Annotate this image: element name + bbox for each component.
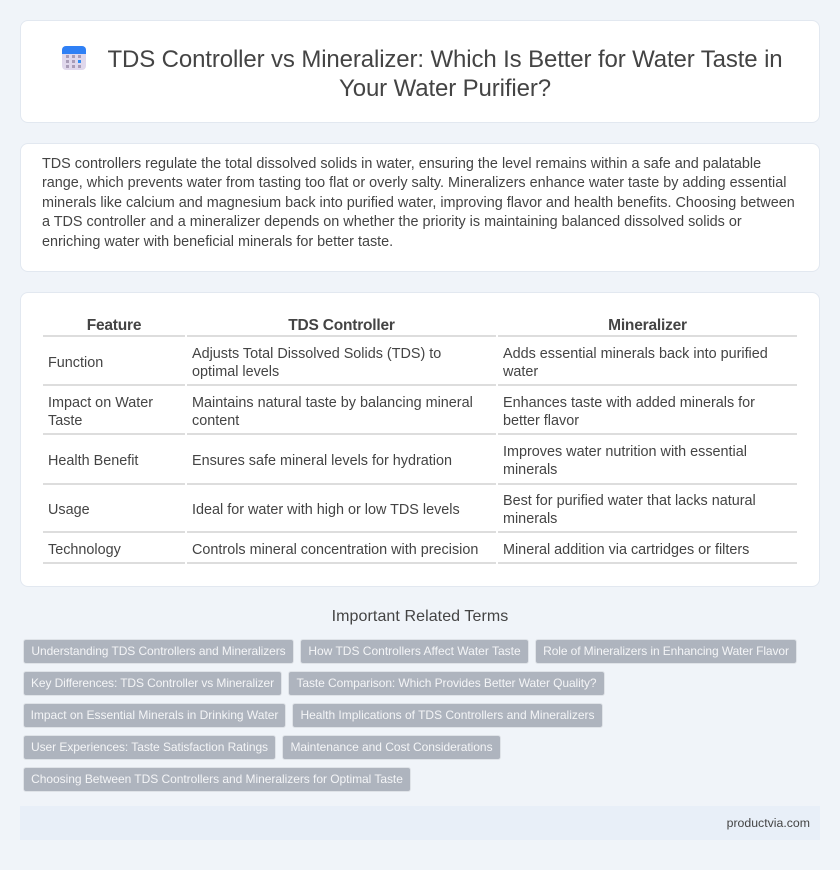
tag: How TDS Controllers Affect Water Taste [308,644,521,658]
panel: title header [20,20,820,123]
tag [23,671,282,696]
comparison table: TDS Controller [288,317,395,334]
comparison table: Technology [48,542,121,558]
text block: intro: TDS controllers regulate the total dissolved solids in water, ensuring the level remains within a safe and palatable [42,156,761,172]
tag [23,639,294,664]
tag: Role of Mineralizers in Enhancing Water Flavor [543,644,789,658]
tag: Maintenance and Cost Considerations [290,740,493,754]
tag: Choosing Between TDS Controllers and Mineralizers for Optimal Taste [31,772,403,786]
comparison table: Controls mineral concentration with precision [192,542,478,558]
comparison table: minerals [503,462,557,478]
panel: comparison table [20,292,820,587]
comparison table: water [503,364,538,380]
tag [288,671,605,696]
comparison table: Adjusts Total Dissolved Solids (TDS) to [192,346,441,362]
tag [292,703,603,728]
text block: intro [42,156,795,250]
tag [23,767,411,792]
comparison table: Usage [48,502,90,518]
tag [23,703,286,728]
text block: intro: minerals like calcium and magnesium back into purified water, improving flavor and health benefits. Choosing between [42,195,795,211]
comparison table: Enhances taste with added minerals for [503,394,755,410]
text block: intro: enriching water with beneficial minerals for better taste. [42,234,393,250]
tag: User Experiences: Taste Satisfaction Ratings [31,740,268,754]
comparison table: Taste [48,412,82,428]
heading: related terms: Important Related Terms [332,608,508,625]
tag [282,735,501,760]
comparison table: Impact on Water [48,394,153,410]
panel: related term tags [23,639,797,792]
title: Your Water Purifier? [339,75,551,102]
tag: Health Implications of TDS Controllers and Mineralizers [300,708,594,722]
comparison table: better flavor [503,412,579,428]
tag: Understanding TDS Controllers and Mineralizers [31,644,286,658]
tag: Key Differences: TDS Controller vs Mineralizer [31,676,274,690]
comparison table: Health Benefit [48,453,138,469]
comparison table: Function [48,354,103,370]
comparison table: Best for purified water that lacks natural [503,493,756,509]
tag [23,735,276,760]
comparison table: Maintains natural taste by balancing mineral [192,394,473,410]
title [107,46,783,102]
comparison table: Improves water nutrition with essential [503,444,747,460]
icon: calendar [62,46,86,70]
footer [20,806,820,840]
comparison table: optimal levels [192,364,279,380]
footer: productvia.com [727,816,810,830]
comparison table: minerals [503,511,557,527]
comparison table: content [192,412,239,428]
comparison table: Ensures safe mineral levels for hydration [192,453,452,469]
title: TDS Controller vs Mineralizer: Which Is Better for Water Taste in [107,46,783,73]
panel: intro paragraph [20,143,820,272]
comparison table: Mineral addition via cartridges or filters [503,542,749,558]
tag [535,639,797,664]
tag: Impact on Essential Minerals in Drinking Water [31,708,278,722]
comparison table: Ideal for water with high or low TDS levels [192,502,460,518]
text block: intro: range, which prevents water from tasting too flat or overly salty. Mineralizers enhance water taste by adding essential [42,175,786,191]
text block: intro: a TDS controller and a mineralizer depends on whether the priority is maintaining balanced dissolved solids or [42,214,742,230]
tag [300,639,529,664]
comparison table: Adds essential minerals back into purified [503,346,768,362]
tag: Taste Comparison: Which Provides Better Water Quality? [296,676,597,690]
comparison table: Feature [87,317,141,334]
comparison table: Mineralizer [608,317,687,334]
comparison table [43,317,797,564]
